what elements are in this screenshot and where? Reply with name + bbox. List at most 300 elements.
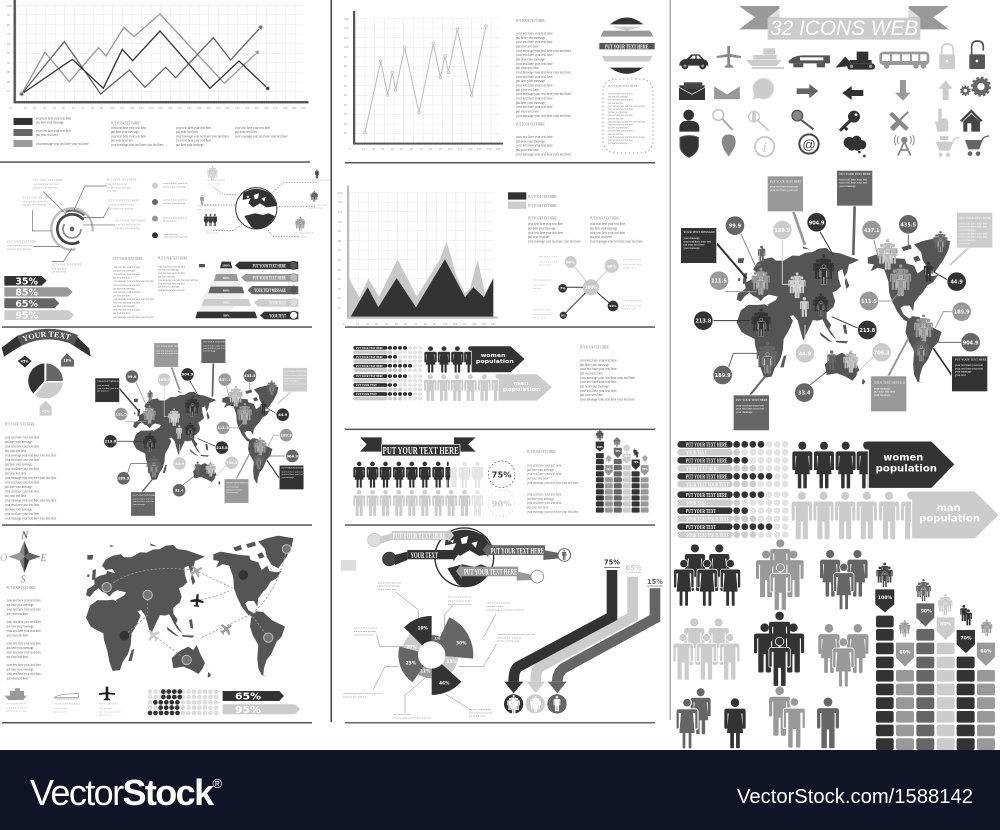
pie chart notes: put here your message [5,439,32,444]
map callout text: your text here your text [959,225,987,229]
divider [345,162,655,164]
icon: magnifier dark [792,110,813,129]
pyramid chart: YOUR TEXT [269,302,286,307]
pie chart notes: your message your text here your text here [5,453,57,457]
line chart axis labels: 60 [7,42,10,46]
network diagram: PUT YOUR TEXT [533,309,552,312]
map callout text: your message [874,393,891,397]
area chart legend: PUT YOUR TEXT HERE [528,194,557,199]
pyramid chart: YOUR TEXT MESSAGE [254,289,286,294]
map values: 213.8 [216,446,228,450]
panel: area chart [338,186,643,326]
compass notes: your text here your text here [7,620,41,624]
transport icons with captions: your message [99,707,112,710]
text columns: put your text here [158,274,175,279]
area chart notes: put here your message [528,226,556,231]
line chart notes: PUT YOUR TEXT HERE [111,121,140,126]
icon: arrow left [842,86,863,100]
map callout text: your text here your text [285,375,306,377]
icon: bus [879,52,929,69]
area chart axis labels: 40 [338,277,341,281]
map values: 437.1 [219,378,231,382]
compass notes: your text here your text here [7,641,41,646]
radial chart labels: put here your message [7,248,32,251]
map values: 435.5 [244,374,256,378]
line chart axis labels: 60 [72,106,75,110]
donut leader lines and labels: your message your text here your text [497,633,535,636]
icon: open padlock [939,44,955,69]
icon: magnifier [713,110,733,130]
line chart axis labels: 10 [7,89,10,93]
text columns: your text here your text here [158,264,185,268]
radial chart labels: PUT YOUR TEXT HERE [116,219,146,223]
column dividers [330,0,671,722]
map callout text: YOUR TEXT MESSAGE [683,230,715,234]
text block: population notes: your text here your text here [580,380,617,384]
line chart notes: put your text here [111,138,133,143]
map values: 111.5 [217,426,229,430]
donut chart: 20% [406,644,417,650]
women row [353,462,483,488]
globe with people: PUT YOUR TEXT [295,232,313,235]
divider [345,722,655,724]
compass notes: your text here your text here [7,629,41,633]
map callout text: your message [959,228,976,232]
icon: house [960,109,983,132]
icon: shopping cart dark [965,136,989,156]
chart axis labels: 100 [448,147,453,151]
pyramid chart: 50% [223,313,230,317]
dot legend: your text here your text [164,236,188,239]
dotted text panel: your text here your text here [608,129,633,133]
map values: 709.3 [874,350,890,356]
compass notes: put your text here [7,612,28,616]
population arrow labels: women [883,453,923,464]
line chart axis labels: 90 [100,106,103,110]
population labels: population [503,387,540,393]
chart axis labels: 120 [344,26,349,30]
panel: flight route world map [0,531,300,717]
divider [2,524,312,526]
percentage arrows: 35% [15,276,39,287]
text block: population notes: your message your text here your text here [580,375,635,380]
line chart notes: your text here your text here [111,134,146,139]
line chart axis labels: 10 [24,106,27,110]
map callout text: your message [97,384,110,387]
compass notes: your text here your text here [7,598,41,603]
pyramid chart: PUT YOUR TEXT HERE [253,277,286,282]
area chart axis labels: 80 [338,239,341,243]
ribbon title: 32 ICONS WEB [770,16,918,40]
dot legend: put here your [163,220,177,223]
map callout text: your text [959,241,970,245]
icon: bulldozer [836,52,875,70]
area chart axis labels: 70 [338,248,341,252]
compass notes: your text here your text here [7,663,41,667]
text columns: your message your text here [158,288,185,292]
line chart axis labels: 20 [7,80,10,84]
map callout text: your text here your text [203,348,225,350]
area chart axis labels: 60 [404,322,407,326]
network diagram: 0% [561,313,566,317]
area chart grid and axes [349,192,494,317]
transport icons with captions: your text here your text [99,710,121,713]
icon: envelope [714,86,740,99]
network diagram: your text here your [539,260,557,263]
area chart axis labels: 100 [443,322,448,326]
line chart axis labels: 160 [168,106,173,110]
network diagram: 90% [609,304,617,308]
line chart notes [111,121,288,147]
radial chart labels: put here your message [23,204,47,207]
compass: O [0,553,7,564]
panel: pie chart with ribbon [2,328,124,520]
dotted text panel: put here your message [608,111,628,114]
donut leader lines and labels: your text here your text [354,627,378,630]
donut leader lines and labels: your text here your text [378,581,401,584]
network diagram: your text here your [623,304,641,307]
chart axis labels: 40 [391,147,394,151]
population row labels: PUT YOUR TEXT [686,525,716,531]
map callout text: PUT YOUR TEXT HERE [203,342,228,344]
map callout text: PUT YOUR TEXT HERE [770,179,802,183]
compass notes: put your text here [7,633,28,638]
text block: population notes: your text here your text here [580,358,617,363]
area chart axis labels: 20 [338,296,341,300]
globe with people: PUT YOUR TEXT [207,179,226,182]
line chart axis labels: 90 [7,13,10,17]
map callout text: your text here your text [839,181,867,185]
map callout text: your text here your text [736,407,764,411]
icon: info [755,137,774,156]
compass notes: PUT YOUR TEXT HERE [7,585,37,590]
chart axis labels: 90 [344,55,347,59]
line chart axis labels: 210 [216,106,221,110]
globe with people [197,166,331,238]
text block: line chart notes: your message your text here your text here [516,70,571,75]
map callout text: your text here your text [959,235,987,239]
dot legend [152,182,188,239]
map callout text: your message [226,486,239,489]
mini bar labels: 100% [597,446,604,449]
map values: 33.4 [175,489,184,493]
donut leader lines and labels: your message your text here your text [487,608,524,611]
map values: 99.9 [729,224,742,230]
long arrows: 75% [604,559,620,567]
divider [345,429,655,430]
map values: 904.9 [287,454,298,458]
chart axis labels: 90 [439,147,442,151]
line chart axis labels: 300 [301,106,306,110]
area chart axis labels: 50 [395,322,398,326]
radial chart labels: PUT YOUR TEXT HERE [109,198,139,202]
donut leader lines and labels: put here your message [448,599,471,602]
panel: single line chart [344,11,503,151]
map values: 189.9 [715,373,731,379]
text block: line chart notes: put your text here [516,109,539,114]
map values [695,220,979,397]
text block: people ratio notes: put your text here [527,476,549,481]
bar chart percentages [878,595,992,655]
pie chart notes: your message your text here your text here [5,498,57,502]
world map [86,536,293,678]
map callout text: put your text here [874,390,896,394]
pie chart: 45% [21,359,29,363]
line chart axis labels: 150 [158,106,163,110]
area chart notes: your message your text here your text here [528,239,581,244]
text block: line chart notes: your text here your text here [516,31,553,36]
map values: 44.9 [799,351,812,357]
donut leader lines and labels: your text here your text [487,602,510,605]
icon: car [679,54,708,69]
area chart notes: your text here your text here [528,222,563,226]
map callout text: put your text here [226,489,242,491]
globe with people: PUT YOUR TEXT [312,179,331,182]
bar chart percentages: 60% [899,649,911,655]
text columns [113,256,199,319]
globe with people: your text here [207,182,220,185]
bar chart percentages: 90% [921,609,932,615]
panel: small population world map [95,339,309,516]
globe with people: your text here your [309,204,327,207]
footer image reference: VectorStock.com/1588142 [737,786,973,808]
text block: line chart notes: put here your message [516,139,545,143]
map values: 111.5 [711,279,727,285]
map values: 189.9 [158,378,170,382]
donut chart: 30% [456,640,467,646]
network diagram: your text here [533,284,546,287]
map values: 213.8 [695,319,712,325]
line chart axis labels: 270 [273,106,278,110]
text block: population notes [580,345,635,402]
chart axis labels: 0 [349,147,351,151]
text block: people ratio notes: your text here your text here [527,472,561,476]
area chart notes [528,216,643,244]
population labels: women [481,353,505,359]
long arrows: 15% [647,578,663,586]
line chart notes: your message your text here your text here [235,134,288,139]
icon: pointing hand [935,108,948,132]
bar chart with people [875,563,995,750]
mini bar labels: 60% [642,468,648,471]
globe with people: your text here your [206,229,224,232]
network diagram: 80% [607,264,616,268]
text columns: put here your message [113,286,135,290]
line chart legend: your text here your text here [36,116,71,121]
radial chart labels: your text here your text [109,203,135,206]
compass [0,531,47,585]
line chart axis labels: 190 [197,106,202,110]
ribbon heading [360,437,476,457]
globe banners [341,528,571,583]
mini bar labels: 70% [633,461,639,464]
map values: 213.8 [859,328,876,334]
map callout text: PUT YOUR TEXT HERE [133,495,157,497]
text block: line chart notes: your text here your text here [516,135,553,139]
donut chart: 11% [420,669,431,675]
text block: people ratio notes: put here your message [527,467,554,472]
map callout text: PUT YOUR TEXT HERE [955,358,987,362]
map callout text [683,172,991,414]
radial chart labels: your text [107,190,116,193]
panel: large population comparison [673,441,999,750]
radial chart labels: your text here your [107,183,127,186]
striped circle badge [599,17,655,74]
map values: 99.9 [128,375,137,379]
long arrows [504,559,663,714]
icon: thought cloud [844,136,866,157]
mini bars [596,430,649,513]
globe with people: put here your [309,206,322,209]
radial chart labels: PUT YOUR TEXT HERE [33,178,63,182]
transport icons with captions: YOUR TEXT MESSAGE [54,702,81,705]
donut leader lines and labels: put your text here [393,713,412,716]
line chart legend: your message your text here your text here [36,142,89,146]
radial chart labels: put here your [52,271,66,274]
text block: line chart notes: your text here your text here [516,83,553,88]
icon: speech bubble [752,78,774,99]
area chart axis labels: 110 [453,322,458,326]
pyramid chart: 60% [223,288,230,292]
ribbon title [739,6,949,40]
donut chart: 1% [434,636,441,640]
line chart axis labels: 100 [7,4,12,8]
map values: 111.5 [861,299,877,305]
map callout text: your message [285,380,297,383]
network diagram: put here your [623,308,636,311]
footer bar [0,750,1000,830]
map callout text: your message [736,410,753,414]
chart axis labels [344,17,501,151]
text block: line chart notes: put your text here [516,148,539,152]
pie chart notes: your text here your text here [5,466,39,471]
pie chart notes: your text here your text here [5,489,39,493]
pie chart notes [5,422,57,520]
chart axis labels: 70 [420,147,423,151]
pie chart notes: your text here your text here [5,511,39,516]
text block: line chart notes: your message your text here your text here [516,48,571,53]
bar chart percentages: 60% [980,649,992,655]
line chart axis labels: 50 [62,106,65,110]
chart axis labels: 20 [372,147,375,151]
text block: line chart notes: your text here your text here [516,40,553,44]
percentage arrows [4,276,74,322]
panel: globe and donut [341,528,663,719]
text columns: put your text here [113,293,131,298]
map callout text: your text here your text [133,501,154,503]
map callout text: your message [133,503,145,506]
radial chart labels: PUT YOUR TEXT HERE [107,178,137,182]
ribbon heading: PUT YOUR TEXT HERE [383,446,459,457]
area chart axis labels [338,191,496,326]
area chart axis labels: 90 [338,229,341,233]
mini bar labels: 90% [615,450,621,453]
area chart axis labels: 130 [338,191,343,195]
line chart notes: your message your text here your text here [111,142,164,147]
chart line [364,25,487,134]
radial chart labels: your text here your text [23,200,48,203]
line chart axis labels: 80 [7,23,10,27]
dotted text panel: put your text here [608,133,624,136]
long arrows: 65% [626,564,642,572]
map values: 44.9 [175,462,185,466]
text columns: your text here your text here [113,264,141,269]
area chart axis labels: 120 [462,322,467,326]
population arrow labels: population [876,463,937,474]
chart axis labels: 130 [477,147,482,151]
pie chart: 42% [42,409,50,413]
transport icons with captions: put your text [54,710,67,713]
globe banners: PUT YOUR TEXT HERE [393,532,446,541]
donut leader lines and labels: your text here your text [343,696,367,699]
network diagram: put here [533,287,541,290]
compass: E [40,553,47,564]
population row labels: PUT YOUR TEXT HERE [686,475,727,481]
area chart axis labels: 30 [338,287,341,291]
map callout text: your text here your text [959,221,987,225]
population rows and arrows [355,346,552,401]
divider [2,722,312,724]
radial chart labels: PUT YOUR TEXT HERE [52,262,82,266]
mini bar labels: 60% [606,468,612,471]
icon: shopping cart light [936,136,959,157]
map callout text: your text here your text [770,185,798,189]
striped circle badge: PUT YOUR TEXT HERE [605,44,649,51]
donut leader lines and labels: put here your message [497,640,520,643]
population labels: PUT YOUR TEXT HERE [356,355,383,359]
network diagram: put here your [539,264,552,267]
donut leader lines and labels: your message your text here your text [343,692,381,695]
chart axis labels: 80 [429,147,432,151]
area chart notes: PUT YOUR TEXT HERE [528,216,557,221]
map callout text: your message [282,476,294,479]
dotted text panel: PUT YOUR TEXT HERE [608,85,638,88]
population row labels: YOUR TEXT [686,451,707,457]
icon: ship [746,48,784,69]
text block: people ratio notes: put here your message [527,496,554,501]
icon: padlock [969,41,985,69]
map callout text [97,342,309,506]
map callout text: your text here your text [156,353,178,355]
donut chart: 15% [446,659,457,665]
dotted text panel: your text here your text here [608,108,633,111]
map values: 111.5 [115,412,127,416]
map values: 44.9 [950,280,963,286]
map callout text: put your text [97,391,109,393]
chart axis labels: 10 [344,131,347,135]
chart axis labels: 80 [344,64,347,68]
map values: 904.9 [963,340,979,346]
area chart axis labels: 100 [338,220,343,224]
text columns: put your text here [113,275,131,280]
icon: tools [891,112,908,129]
map values: 904.9 [809,220,825,226]
dot legend: your text here your text [163,216,187,219]
text columns: your message your text here your text here [113,279,154,283]
area chart axis labels: 10 [338,306,341,310]
map callout text: put your text here [683,243,705,247]
network diagram [533,256,642,319]
text block: people ratio notes: your text here your text here [527,492,561,497]
world map with callouts [95,339,307,516]
map callout text: your message [959,238,976,242]
compass notes: your text here your text here [7,607,41,612]
text block: line chart notes: put here your message [516,79,545,83]
panel: large population world map [681,170,993,431]
text block: population notes: your message your text here your text here [580,397,635,402]
text block: line chart notes: your text here your text here [516,61,553,66]
map values: 709.3 [226,461,238,465]
